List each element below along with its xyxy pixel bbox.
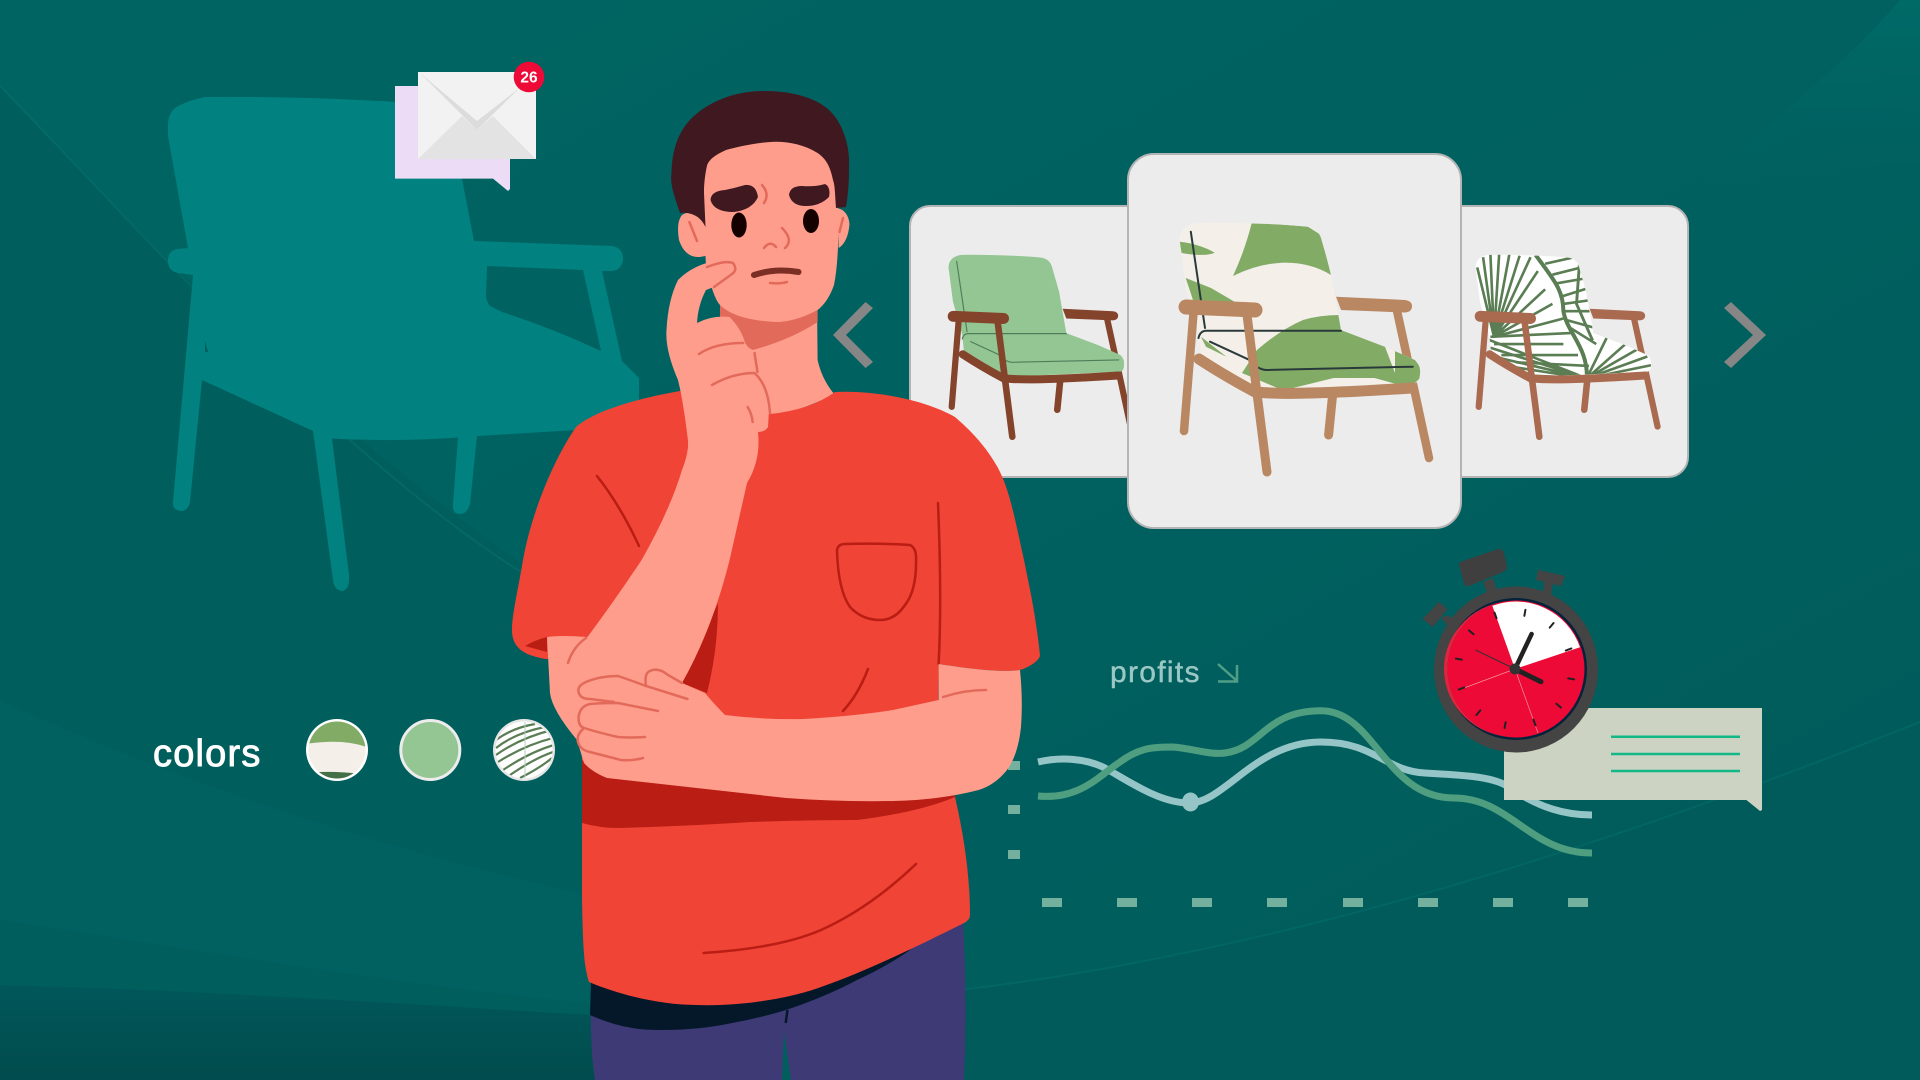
shirt details [597,476,940,953]
line series: green [1038,711,1592,853]
email notification icon: 26 [520,70,538,86]
line series: light [1038,742,1592,815]
arm: raised to chin [547,261,770,760]
pants [591,910,966,1080]
hair [671,91,849,227]
t-shirt [512,391,1040,1005]
waistband shadow [590,947,914,1030]
ear: left [678,212,710,257]
chart axis dashes [1008,761,1588,907]
person thinking [512,91,1040,1080]
label: profits: profits [1110,656,1201,689]
chair: green and cream pattern [1180,222,1429,472]
chair: leaf pattern [1476,254,1658,437]
shirt shadows [525,603,955,828]
neck shadow [720,303,818,350]
line chart: profits [1008,711,1592,907]
face [704,140,838,322]
icon: down arrow [1218,664,1237,682]
mouth [754,271,798,275]
arrow: previous [833,302,873,368]
ghost chair silhouette [168,97,639,591]
card: green chair [910,206,1150,477]
swatch: leaf pattern [493,719,555,781]
swatch: green and cream [306,719,368,781]
neck [720,300,835,425]
ear: right [837,208,850,248]
chair: solid green [948,255,1131,437]
speech bubble [1504,708,1762,811]
email notification icon [395,62,544,191]
hand and finger lines [568,262,986,760]
stopwatch [1422,549,1598,752]
facial lines [689,185,843,283]
head and neck [671,91,850,425]
arrow: next [1724,302,1766,368]
eyebrows [710,184,830,212]
eyes [731,209,819,238]
label: colors: colors [153,733,262,775]
forearm: folded [577,664,1022,801]
card: featured chair [1128,154,1461,528]
swatch: solid green [401,720,460,780]
card: leaf chair [1440,206,1688,477]
